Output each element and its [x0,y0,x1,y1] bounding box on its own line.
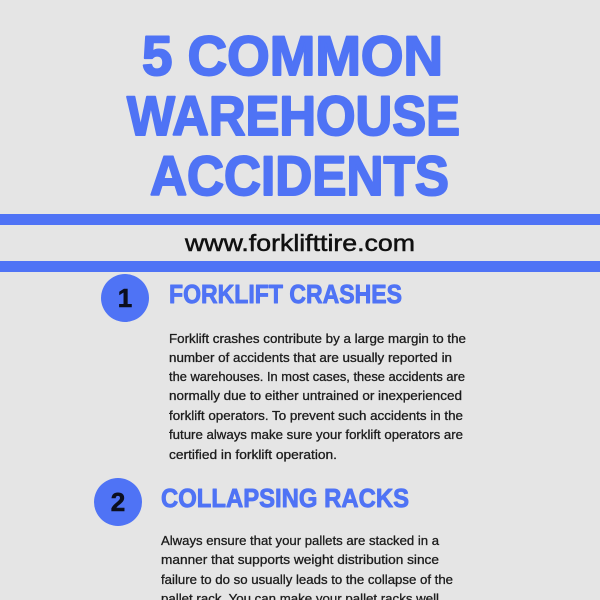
text block: forklift crashes [169,331,466,462]
heading: collapsing racks: COLLAPSING RACKS [161,483,409,513]
text block: collapsing racks: manner that supports weight distribution since [161,552,439,567]
text block: forklift crashes: future always make sure your forklift operators are [169,427,463,442]
title: WAREHOUSE [127,84,460,147]
text block: forklift crashes: forklift operators. To prevent such accidents in the [169,408,463,423]
icon: number 1 badge: 1 [118,283,132,313]
text block: forklift crashes: the warehouses. In most cases, these accidents are [169,369,465,384]
icon: number 1 badge [101,274,149,322]
text block: collapsing racks: Always ensure that your pallets are stacked in a [161,533,440,548]
heading: forklift crashes: FORKLIFT CRASHES [169,279,402,309]
icon: number 2 badge [94,478,142,526]
text block: collapsing racks [161,533,453,600]
website banner [0,214,600,272]
panel: collapsing racks [94,478,453,600]
text block: forklift crashes: number of accidents that are usually reported in [169,350,452,365]
title: ACCIDENTS [150,144,449,207]
text block: collapsing racks: failure to do so usually leads to the collapse of the [161,572,453,587]
icon: number 2 badge: 2 [111,487,125,517]
text block: forklift crashes: Forklift crashes contribute by a large margin to the [169,331,466,346]
text block: forklift crashes: normally due to either untrained or inexperienced [169,388,462,403]
title [127,24,460,207]
website banner: www.forklifttire.com [184,230,415,256]
panel: forklift crashes [101,274,466,462]
title: 5 COMMON [142,24,443,87]
text block: forklift crashes: certified in forklift operation. [169,447,337,462]
